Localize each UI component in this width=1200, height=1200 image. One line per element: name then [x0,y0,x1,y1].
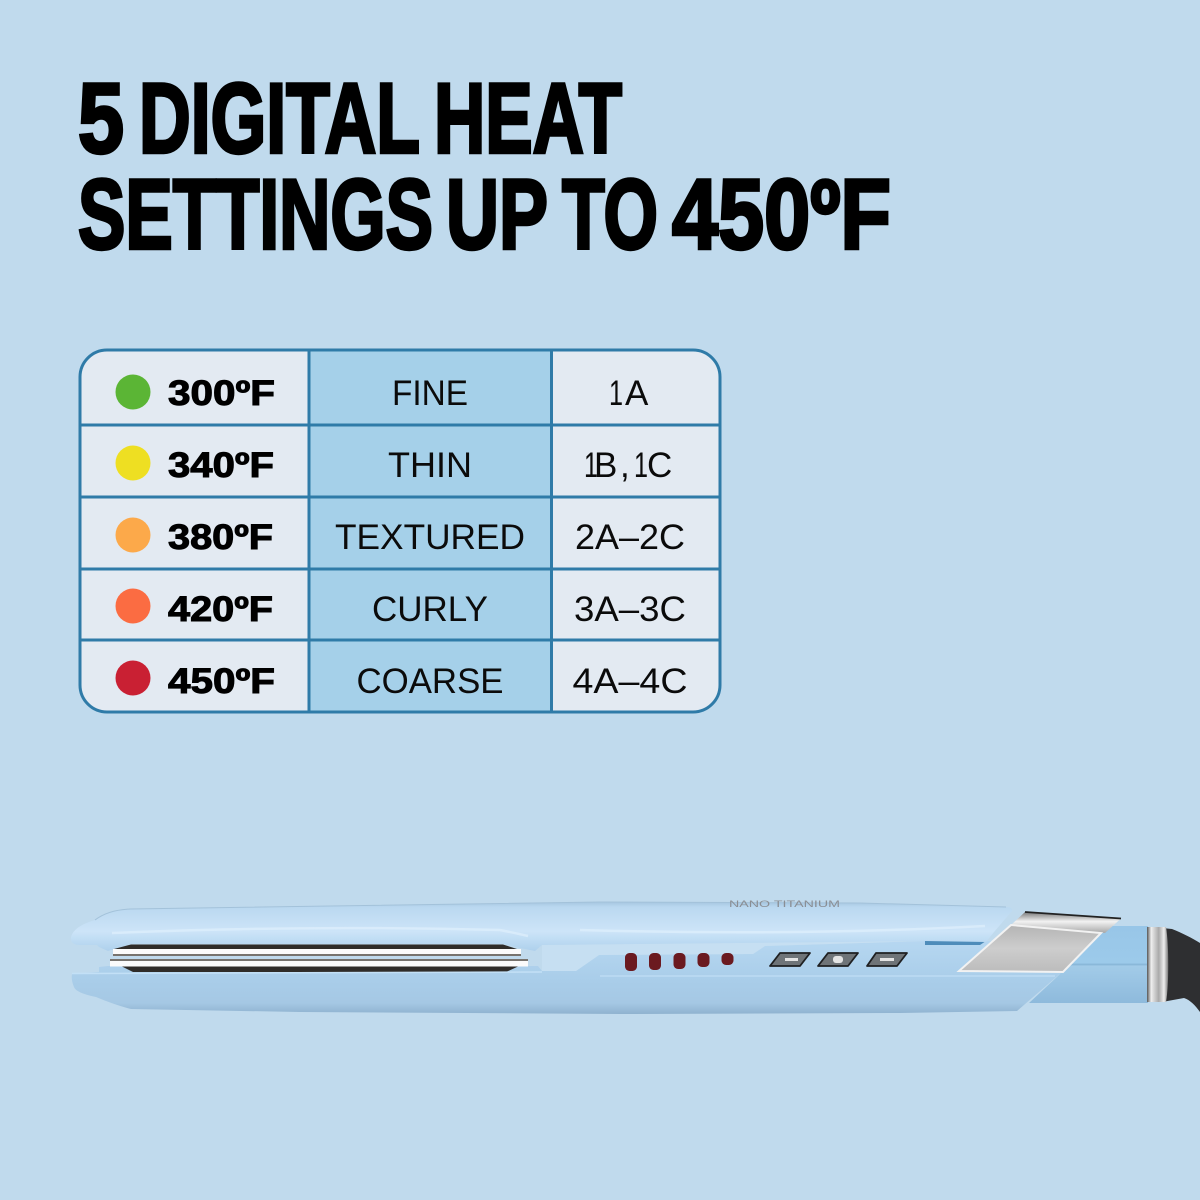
table grid lines [80,350,720,712]
row: 450F: COARSE [356,662,504,701]
row: 420F [116,588,686,629]
row: 340F: 1 [584,446,598,485]
title: SETTINGS [78,158,433,270]
product name on arm: NANO TITANIUM [729,899,840,910]
hair straightener [71,899,1200,1014]
row: 380F: TEXTURED [335,518,525,557]
heat indicator lights [625,953,734,971]
row: 300F: FINE [392,374,468,413]
gap between arms [542,941,925,971]
upper arm top edge [95,902,1006,920]
row: 300F: A [625,374,649,413]
lower arm [72,941,1062,1014]
upper arm [71,902,1012,951]
metal ring [1147,927,1168,1002]
lower arm top lip [72,972,542,974]
title: 450ºF [672,158,891,270]
row: 340F: B [594,446,617,485]
title: TO [562,158,658,270]
row: 450F [116,660,688,701]
hair type column [309,350,551,712]
title: DIGITAL [139,62,420,174]
row: 450F: 450ºF [168,662,275,701]
row: 380F [116,518,685,557]
row: 380F: 2A–2C [575,518,685,557]
row: 380F: 380ºF [168,518,273,557]
lower arm edge highlight [600,975,1055,977]
upper ceramic plate [113,944,521,956]
row: 300F: 300ºF [168,374,275,413]
metal hinge plate [959,912,1121,972]
vent slot [925,940,986,945]
row: 420F: 3A–3C [574,590,686,629]
lower ceramic plate [110,959,528,972]
row: 420F: 420ºF [168,590,273,629]
control buttons [770,953,907,966]
title [78,62,891,270]
title: HEAT [434,62,622,174]
row: 340F: , [620,446,630,485]
row: 340F: 340ºF [168,446,274,485]
row: 300F [116,374,649,413]
row: 340F: THIN [388,446,472,485]
power cord grip [1162,928,1200,1012]
row: 450F: 4A–4C [572,662,688,701]
table panel background [80,350,720,712]
title: 5 [78,62,124,174]
row: 340F [116,446,672,485]
row: 340F: 1 [634,446,648,485]
row: 340F: C [647,446,672,485]
upper arm highlight [112,926,985,936]
barrel neck [1029,926,1148,1003]
title: UP [446,158,548,270]
row: 300F: 1 [609,374,623,413]
row: 420F: CURLY [372,590,488,629]
heat settings table [80,350,720,712]
